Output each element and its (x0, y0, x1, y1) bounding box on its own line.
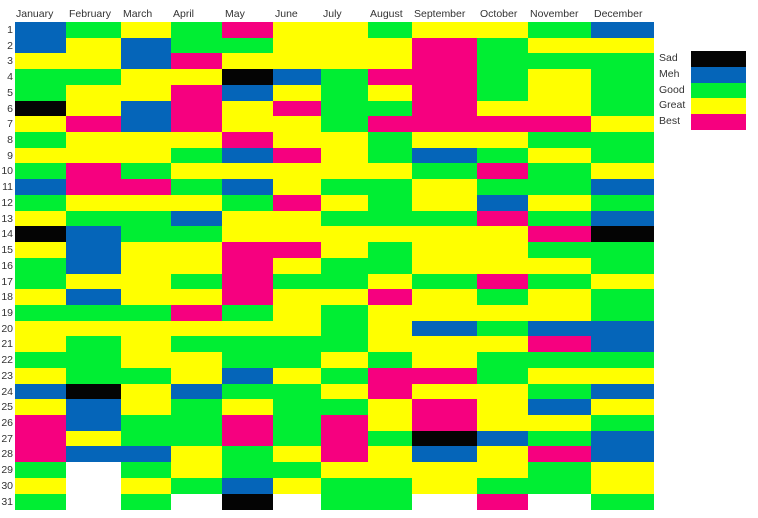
row: day 9: 9 (7, 150, 13, 162)
row: day 3: 3 (7, 55, 13, 67)
row: day 4: 4 (7, 71, 13, 83)
month headings: December (594, 8, 642, 20)
row: day 27 (1, 431, 654, 446)
row: day 4 (7, 69, 654, 85)
row: day 12 (1, 195, 654, 211)
legend item: Sad: Sad (659, 52, 678, 64)
row: day 6 (7, 101, 654, 116)
row: day 31 (1, 494, 654, 510)
month headings: February (69, 8, 111, 20)
legend item: Great: Great (659, 99, 685, 111)
row: day 25: 25 (1, 401, 13, 413)
row: day 15: 15 (1, 244, 13, 256)
row: day 19 (1, 305, 654, 321)
row: day 16 (1, 258, 654, 274)
row: day 11: 11 (2, 181, 13, 193)
row: day 14: 14 (1, 228, 13, 240)
month headings: May (225, 8, 245, 20)
row: day 21 (1, 336, 654, 352)
row: day 22: 22 (1, 354, 13, 366)
row: day 24: 24 (1, 386, 13, 398)
row: day 27: 27 (1, 433, 13, 445)
row: day 16: 16 (1, 260, 13, 272)
row: day 29: 29 (1, 464, 13, 476)
month headings: September (414, 8, 465, 20)
month headings: November (530, 8, 578, 20)
row: day 5: 5 (7, 87, 13, 99)
row: day 18 (1, 289, 654, 305)
row: day 30 (1, 478, 654, 494)
month headings: April (173, 8, 194, 20)
row: day 20 (1, 321, 654, 336)
row: day 31: 31 (1, 496, 13, 508)
row: day 28: 28 (1, 448, 13, 460)
row: day 9 (7, 148, 654, 163)
month headings: October (480, 8, 517, 20)
row: day 8 (7, 132, 654, 148)
row: day 5 (7, 85, 654, 101)
row: day 15 (1, 242, 654, 258)
row: day 11 (2, 179, 654, 195)
month headings: July (323, 8, 342, 20)
row: day 23: 23 (1, 370, 13, 382)
legend item: Best (659, 114, 746, 130)
month headings (16, 8, 642, 20)
month headings: August (370, 8, 403, 20)
row: day 24 (1, 384, 654, 399)
row: day 13: 13 (1, 213, 13, 225)
row: day 1: 1 (7, 24, 13, 36)
row: day 8: 8 (7, 134, 13, 146)
month headings: March (123, 8, 152, 20)
legend item: Meh: Meh (659, 68, 679, 80)
month headings: June (275, 8, 298, 20)
row: day 7: 7 (7, 118, 13, 130)
row: day 30: 30 (1, 480, 13, 492)
row: day 17 (1, 274, 654, 289)
row: day 13 (1, 211, 654, 226)
row: day 12: 12 (1, 197, 13, 209)
row: day 29 (1, 462, 654, 478)
month headings: January (16, 8, 53, 20)
row: day 26: 26 (1, 417, 13, 429)
legend (659, 51, 746, 130)
row: day 2 (7, 38, 654, 53)
row: day 17: 17 (1, 276, 13, 288)
row: day 2: 2 (7, 40, 13, 52)
row: day 6: 6 (7, 103, 13, 115)
legend item: Best: Best (659, 115, 680, 127)
row: day 18: 18 (1, 291, 13, 303)
row: day 3 (7, 53, 654, 69)
row: day 23 (1, 368, 654, 384)
row: day 21: 21 (1, 338, 13, 350)
row: day 26 (1, 415, 654, 431)
row: day 7 (7, 116, 654, 132)
legend item: Good: Good (659, 84, 685, 96)
legend item: Meh (659, 67, 746, 83)
legend item: Great (659, 98, 746, 114)
row: day 22 (1, 352, 654, 368)
row: day 14 (1, 226, 654, 242)
row: day 20: 20 (1, 323, 13, 335)
legend item: Good (659, 83, 746, 98)
row: day 28 (1, 446, 654, 462)
row: day 25 (1, 399, 654, 415)
legend item: Sad (659, 51, 746, 67)
row: day 10: 10 (1, 165, 13, 177)
row: day 10 (1, 163, 654, 179)
row: day 1 (7, 22, 654, 38)
row: day 19: 19 (1, 307, 13, 319)
